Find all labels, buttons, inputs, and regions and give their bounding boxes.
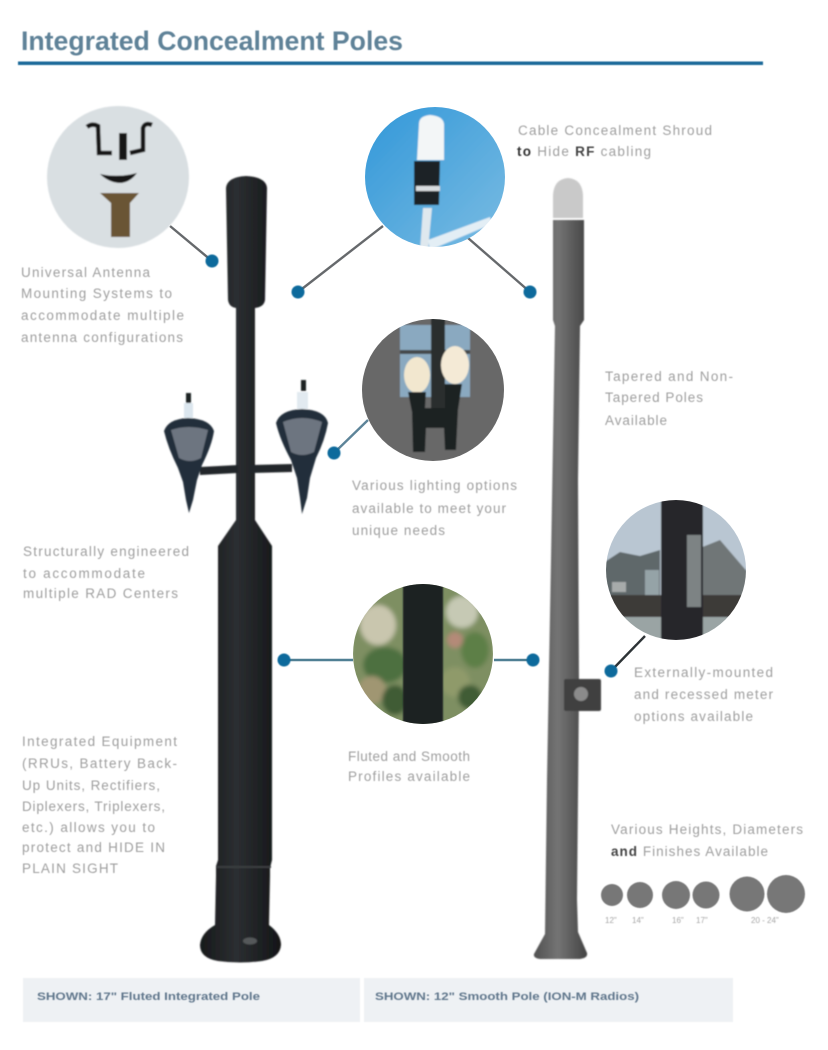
text: integrated equipment: Up Units, Rectifiers, bbox=[22, 778, 160, 793]
diameter size chart: 14" bbox=[632, 916, 644, 925]
text: meter options: and recessed meter bbox=[634, 687, 774, 702]
title: Integrated Concealment Poles bbox=[21, 26, 403, 56]
text: meter options: options available bbox=[634, 709, 753, 724]
text: cable concealment: Cable Concealment Shroud bbox=[518, 123, 712, 138]
text: lighting options: unique needs bbox=[352, 523, 445, 538]
text: universal antenna: antenna configurations bbox=[21, 330, 183, 345]
photo: meter options bbox=[606, 500, 746, 640]
left lamp bbox=[164, 393, 214, 513]
text: meter options: Externally-mounted bbox=[634, 665, 773, 680]
text: fluted and smooth: Fluted and Smooth bbox=[348, 749, 470, 764]
text: integrated equipment: protect and HIDE IN bbox=[22, 840, 165, 855]
text: lighting options bbox=[352, 478, 517, 538]
text: integrated equipment: Integrated Equipment bbox=[22, 734, 177, 749]
meter box bbox=[564, 679, 601, 711]
diameter size chart bbox=[601, 875, 805, 925]
photo: lighting options bbox=[362, 319, 504, 461]
text: tapered poles: Available bbox=[605, 413, 667, 428]
text: fluted and smooth: Profiles available bbox=[348, 769, 470, 784]
photo: fluted and smooth profiles bbox=[353, 584, 493, 724]
text: tapered poles: Tapered Poles bbox=[605, 390, 703, 405]
text: universal antenna bbox=[21, 265, 184, 345]
text: structurally engineered: multiple RAD Centers bbox=[23, 586, 178, 601]
text: lighting options: available to meet your bbox=[352, 501, 506, 516]
diameter size chart: 17" bbox=[696, 916, 708, 925]
text: universal antenna: Universal Antenna bbox=[21, 265, 150, 280]
caption bar: fluted pole: SHOWN: 17" Fluted Integrated Pole bbox=[37, 991, 260, 1003]
text: integrated equipment bbox=[22, 734, 177, 876]
left integrated pole bbox=[164, 176, 328, 962]
text: tapered poles: Tapered and Non- bbox=[605, 369, 733, 384]
text: integrated equipment: Diplexers, Triplexers, bbox=[22, 799, 165, 814]
text: structurally engineered bbox=[23, 544, 189, 601]
text: heights and diameters bbox=[611, 822, 803, 859]
text: structurally engineered: Structurally engineered bbox=[23, 544, 189, 559]
text: meter options bbox=[634, 665, 774, 724]
text: lighting options: Various lighting options bbox=[352, 478, 517, 493]
diameter size chart: 20 - 24" bbox=[751, 916, 779, 925]
text: integrated equipment: (RRUs, Battery Back- bbox=[22, 756, 177, 771]
text: integrated equipment: etc.) allows you to bbox=[22, 820, 155, 835]
lamp arms bbox=[200, 464, 292, 475]
diameter size chart: 12" bbox=[605, 916, 617, 925]
caption bar: fluted pole bbox=[23, 978, 360, 1022]
photo: antenna mounts bbox=[47, 106, 189, 248]
text: heights and diameters: Various Heights, Diameters bbox=[611, 822, 803, 837]
diameter size chart: 16" bbox=[672, 916, 684, 925]
text: structurally engineered: to accommodate bbox=[23, 566, 145, 581]
caption bar: smooth pole bbox=[364, 978, 733, 1022]
photo: cable shroud bbox=[365, 107, 505, 247]
callout dots bbox=[206, 254, 618, 678]
text: cable concealment: to Hide RF cabling bbox=[517, 144, 651, 159]
text: cable concealment bbox=[517, 123, 712, 159]
callout lines bbox=[170, 226, 645, 671]
text: universal antenna: Mounting Systems to bbox=[21, 286, 172, 301]
text: heights and diameters: and Finishes Available bbox=[611, 844, 768, 859]
right lamp bbox=[276, 380, 328, 514]
right smooth pole bbox=[534, 178, 601, 959]
text: fluted and smooth bbox=[348, 749, 470, 784]
text: tapered poles bbox=[605, 369, 733, 428]
caption bar: smooth pole: SHOWN: 12" Smooth Pole (ION-M Radios) bbox=[375, 991, 639, 1003]
text: integrated equipment: PLAIN SIGHT bbox=[22, 861, 118, 876]
text: universal antenna: accommodate multiple bbox=[21, 308, 184, 323]
